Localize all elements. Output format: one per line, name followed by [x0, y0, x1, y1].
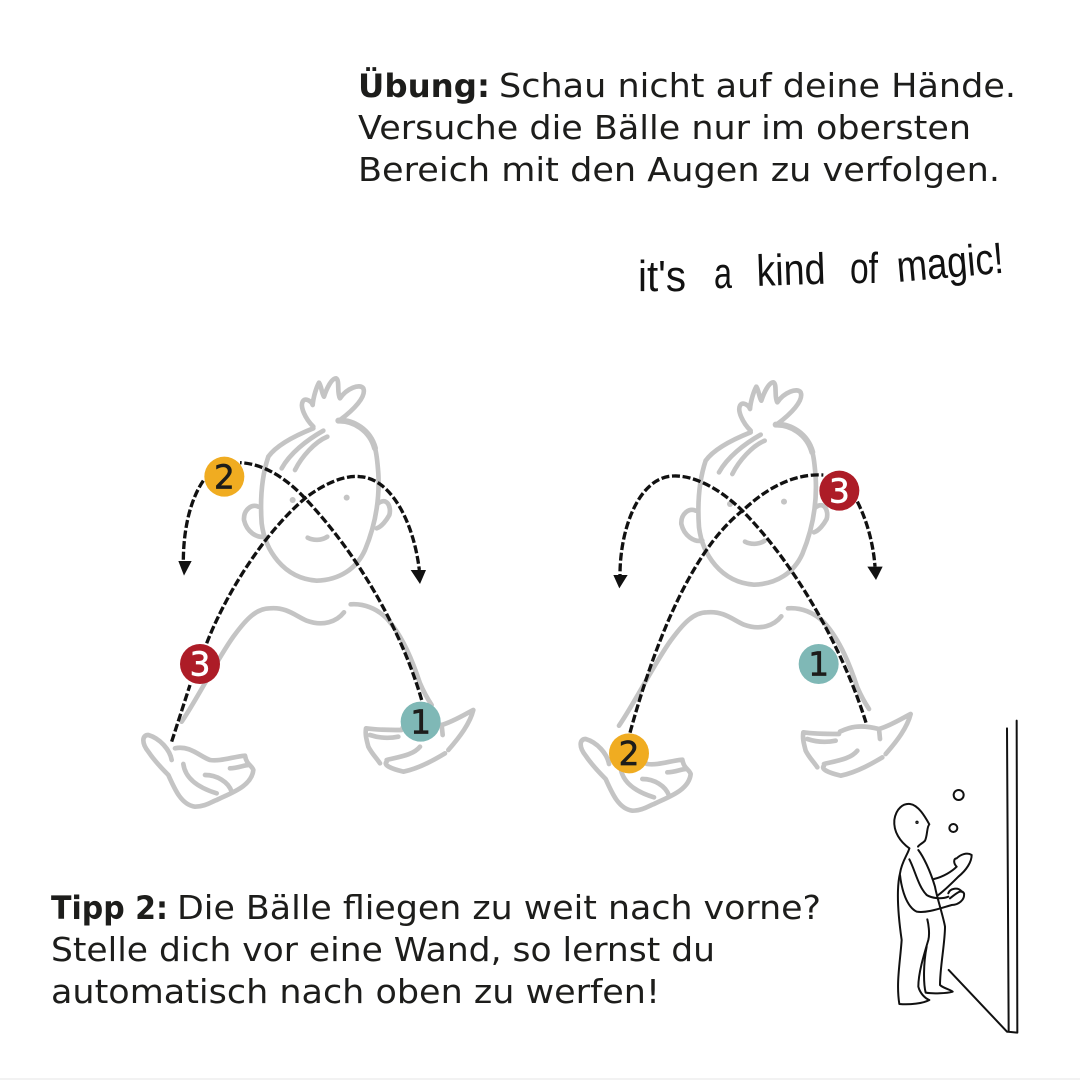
- ball 2: 2: [619, 735, 639, 773]
- handwritten note: it's a kind of magic: kind: [756, 245, 826, 296]
- ball 1: [401, 702, 441, 742]
- ball 2: 2: [214, 458, 235, 496]
- grey figure: [581, 382, 911, 811]
- ball 1: 1: [410, 703, 431, 741]
- text block: Übung instructions: [358, 66, 1016, 189]
- handwritten note: it's a kind of magic: [638, 234, 1005, 301]
- ball 3: [819, 471, 859, 511]
- ball 1: 1: [808, 646, 829, 684]
- text block: Übung instructions: Schau nicht auf deine Hände.: [499, 66, 1016, 105]
- ball 2: [609, 733, 649, 773]
- handwritten note: it's a kind of magic: magic!: [895, 234, 1005, 292]
- text block: Tipp 2: Die Bälle fliegen zu weit nach vorne?: [177, 888, 821, 927]
- arrowheads: [613, 567, 883, 588]
- dashed ball paths: [620, 475, 875, 733]
- ball 2: [204, 457, 244, 497]
- ball 3: 3: [190, 646, 210, 684]
- diagram: right figure, catch of ball 2: [581, 382, 911, 811]
- dashed ball paths: [172, 463, 422, 742]
- handwritten note: it's a kind of magic: a: [714, 249, 732, 298]
- text block: Tipp 2: [51, 888, 821, 1011]
- ball 3: [180, 644, 220, 684]
- text block: Übung instructions: Bereich mit den Augen zu verfolgen.: [358, 150, 1000, 189]
- diagram: left figure, throw of ball 2: [143, 378, 473, 807]
- grey figure: [143, 378, 473, 807]
- icon: person juggling in front of a wall: [894, 721, 1017, 1033]
- ball 1: [799, 644, 839, 684]
- text block: Übung instructions: Übung:: [358, 67, 490, 105]
- text block: Tipp 2: Tipp 2:: [51, 889, 168, 927]
- text block: Übung instructions: Versuche die Bälle nur im obersten: [358, 108, 971, 147]
- arrowheads: [178, 561, 426, 584]
- handwritten note: it's a kind of magic: it's: [638, 252, 686, 301]
- ball 3: 3: [829, 472, 850, 510]
- handwritten note: it's a kind of magic: of: [850, 244, 879, 293]
- text block: Tipp 2: automatisch nach oben zu werfen!: [51, 972, 660, 1011]
- text block: Tipp 2: Stelle dich vor eine Wand, so lernst du: [51, 930, 715, 969]
